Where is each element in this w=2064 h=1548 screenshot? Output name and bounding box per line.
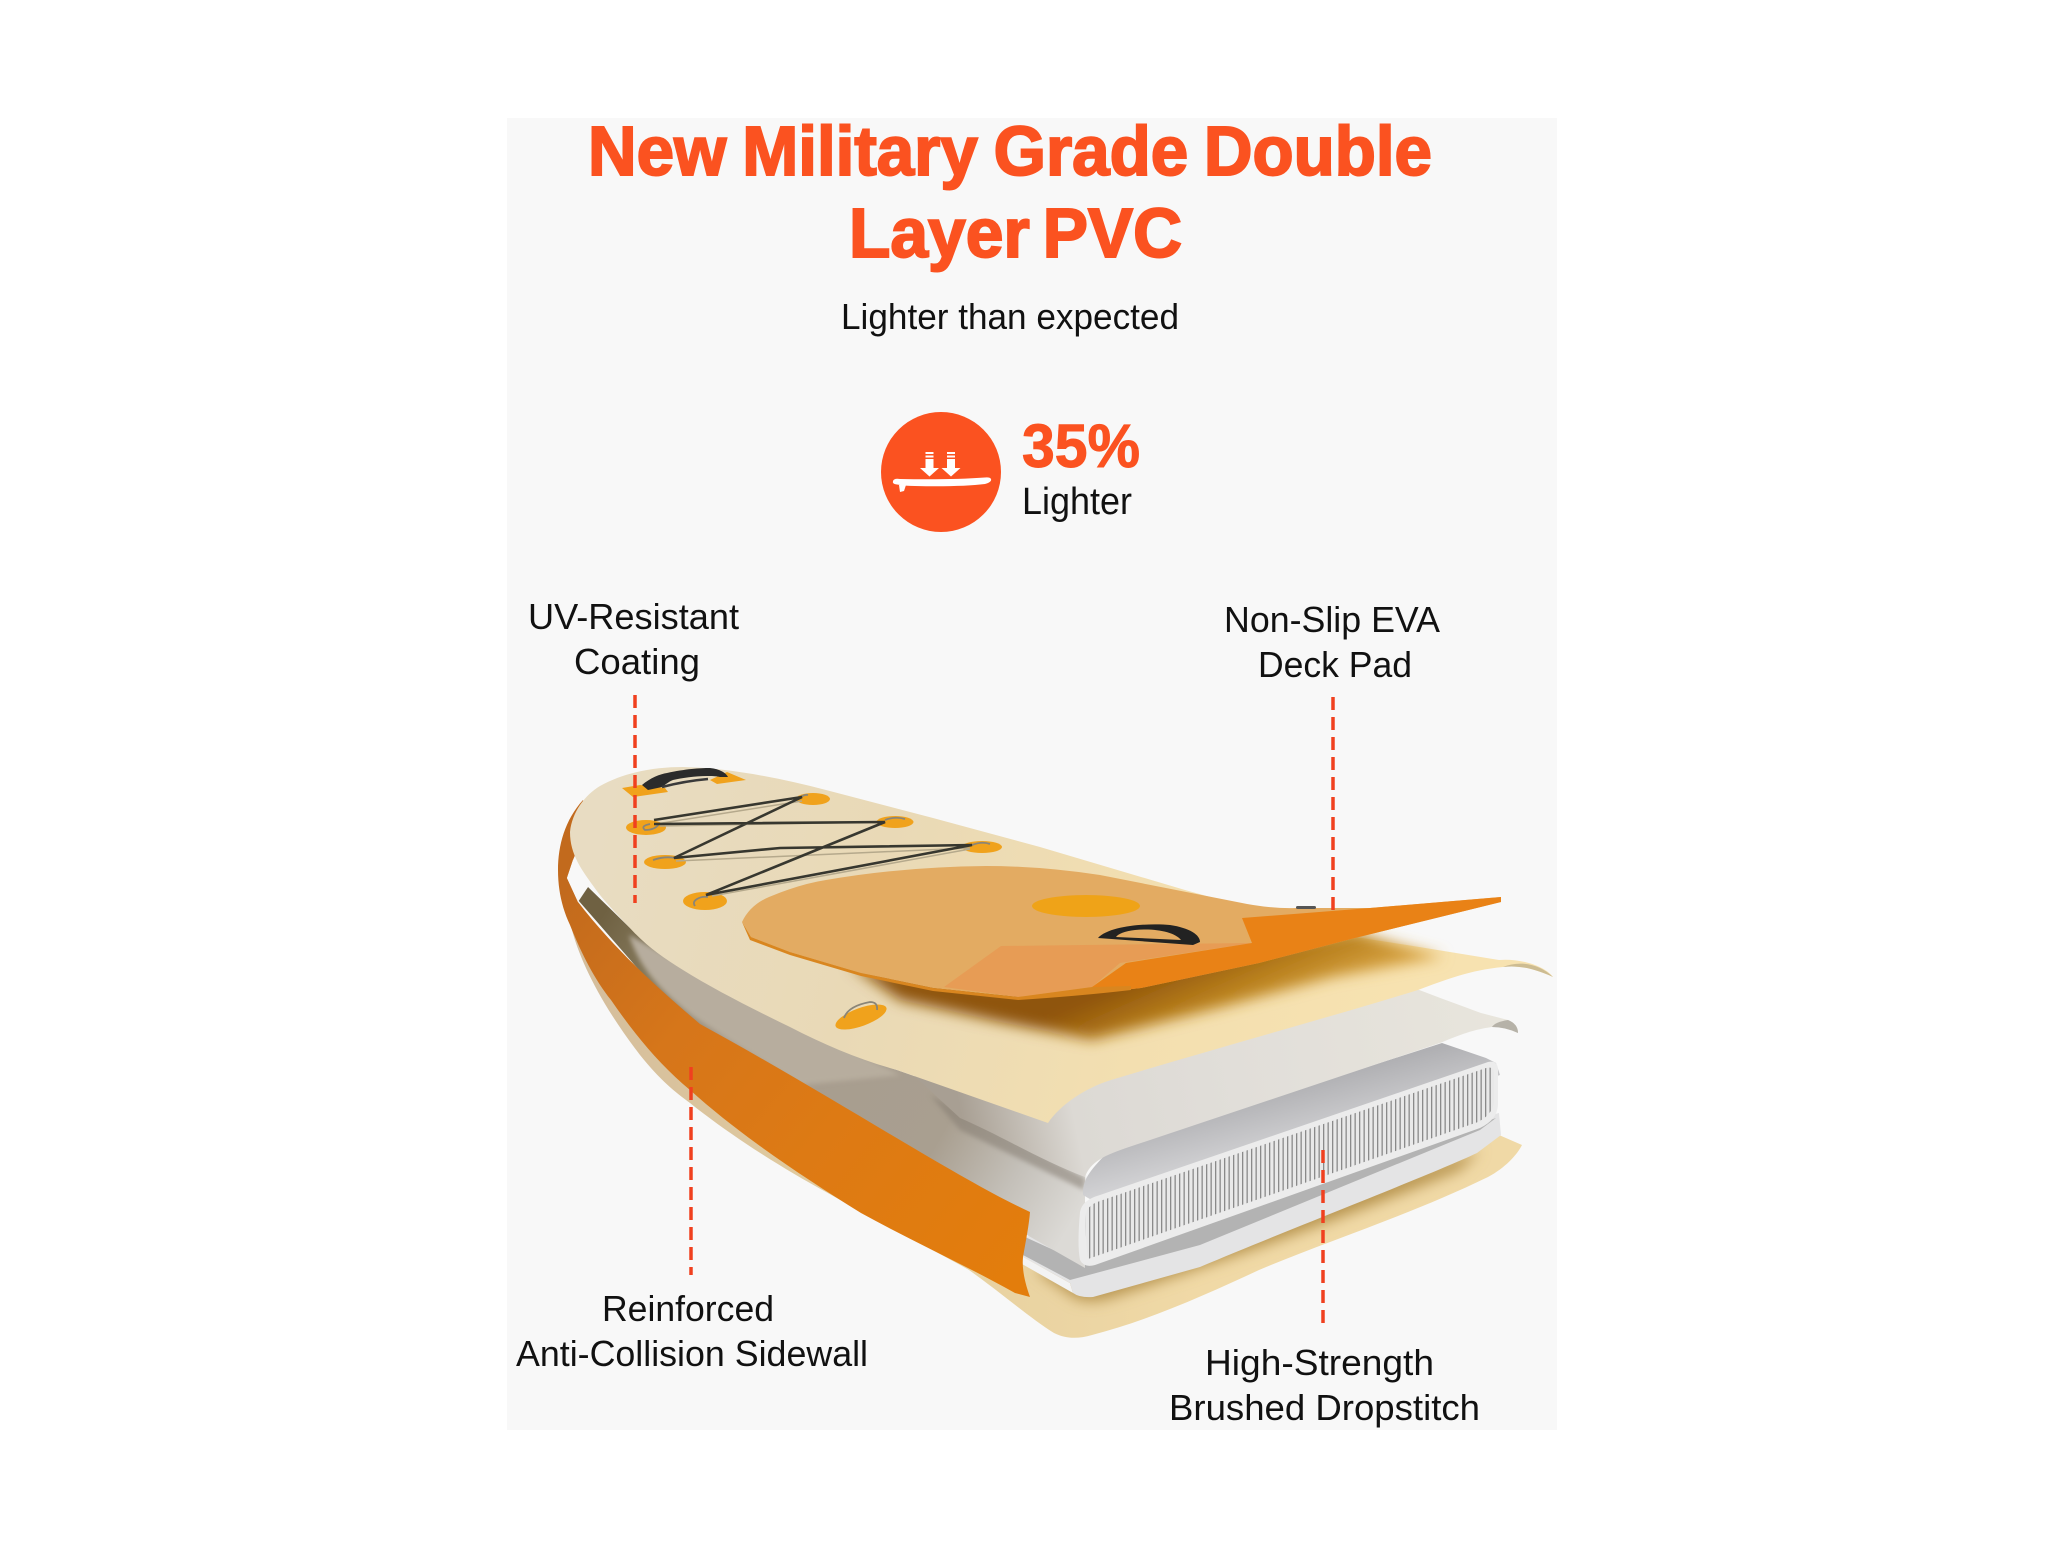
callout: high-strength brushed dropstitch: Brushed Dropstitch <box>1169 1387 1480 1428</box>
lower layer grey band <box>1023 1118 1496 1280</box>
small ring at pad edge <box>1296 906 1316 909</box>
soft shadow under lower layer <box>1035 1150 1480 1301</box>
panel: light grey background <box>507 118 1557 1430</box>
carry handle strap <box>662 779 708 787</box>
body shadow under second layer <box>930 1095 1085 1190</box>
D-ring loops <box>643 795 990 1018</box>
shadow under deck pad <box>850 932 1444 1040</box>
sidewall gap <box>567 860 588 902</box>
D-ring patches <box>626 793 1002 1035</box>
callout: UV-resistant coating <box>528 596 739 903</box>
deck pad <box>742 866 1501 1000</box>
dropstitch core frame <box>1078 1062 1498 1266</box>
title <box>588 112 1432 272</box>
bottom layer <box>572 930 1522 1338</box>
stat: 35% lighter: Lighter <box>1022 481 1132 523</box>
orange reinforced sidewall <box>558 800 1030 1297</box>
callout: high-strength brushed dropstitch: High-Strength <box>1205 1342 1434 1383</box>
callout: reinforced anti-collision sidewall: Anti-Collision Sidewall <box>516 1333 868 1374</box>
second layer curl tip <box>1492 1020 1518 1033</box>
bungee lacing <box>654 797 972 895</box>
grey inner body <box>578 887 1085 1268</box>
deck top layer <box>570 767 1553 1123</box>
callout: non-slip EVA deck pad <box>1224 599 1440 915</box>
carry handle <box>642 768 728 790</box>
lower layer highlight strip <box>1022 1257 1073 1293</box>
dropstitch core top face <box>1083 1043 1500 1205</box>
pad handle <box>1098 924 1200 945</box>
lower white layer <box>1023 1113 1501 1297</box>
title: Layer PVC <box>849 194 1182 272</box>
callout: UV-resistant coating: Coating <box>574 641 700 682</box>
dropstitch ribs <box>1086 1068 1494 1259</box>
callout: non-slip EVA deck pad: Deck Pad <box>1258 644 1412 685</box>
deck curled end shading <box>1503 964 1553 977</box>
callout: non-slip EVA deck pad: Non-Slip EVA <box>1224 599 1440 640</box>
subtitle: Lighter than expected <box>841 296 1179 337</box>
pad oval logo <box>1032 895 1140 917</box>
title: New Military Grade Double <box>588 112 1432 190</box>
bungee lacing highlights <box>656 801 970 896</box>
callout: UV-resistant coating: UV-Resistant <box>528 596 739 637</box>
callout: high-strength brushed dropstitch <box>1169 1150 1480 1428</box>
lighter inner layer near the nose <box>629 935 900 1085</box>
second foam layer <box>897 988 1518 1177</box>
stat: 35% lighter <box>1022 412 1140 523</box>
paddle board cutaway illustration <box>558 767 1553 1338</box>
icon: board with downward arrows in orange circle <box>881 412 1001 532</box>
carry handle patches <box>622 772 746 797</box>
stat: 35% lighter: 35% <box>1022 412 1140 480</box>
callout: reinforced anti-collision sidewall <box>516 1067 868 1374</box>
callout: reinforced anti-collision sidewall: Reinforced <box>602 1288 774 1329</box>
